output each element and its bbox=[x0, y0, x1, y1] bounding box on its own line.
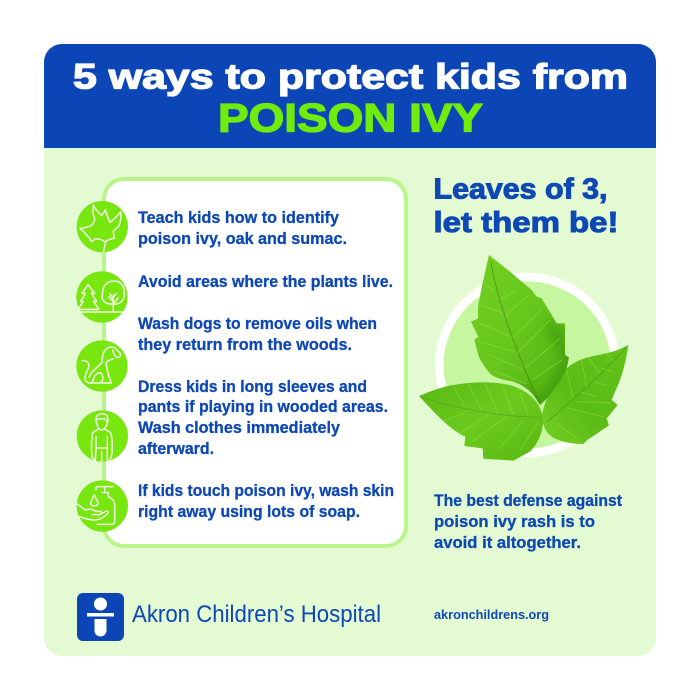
text: best defense: The best defense against bbox=[434, 491, 622, 510]
header banner bbox=[44, 44, 656, 148]
tip 1 text bbox=[138, 208, 347, 248]
title line 2: POISON IVY bbox=[218, 96, 483, 140]
tip 5 text: right away using lots of soap. bbox=[138, 502, 360, 521]
tip 1 text: poison ivy, oak and sumac. bbox=[138, 229, 347, 248]
tip 5 text: If kids touch poison ivy, wash skin bbox=[138, 481, 394, 500]
tip 4 text: pants if playing in wooded areas. bbox=[138, 397, 388, 416]
tip 1 text: Teach kids how to identify bbox=[138, 208, 340, 227]
tip 4 text: afterward. bbox=[138, 439, 214, 458]
logo: hospital mark bbox=[77, 593, 124, 641]
left leaf bbox=[419, 382, 543, 461]
tip 4 text: Dress kids in long sleeves and bbox=[138, 377, 367, 396]
tip 3 text: Wash dogs to remove oils when bbox=[138, 314, 377, 333]
website: akronchildrens.org bbox=[434, 607, 549, 622]
text: best defense: avoid it altogether. bbox=[434, 533, 581, 552]
heading: leaves of 3: Leaves of 3, bbox=[434, 174, 608, 206]
tip 3 text bbox=[138, 314, 377, 354]
title line 1: 5 ways to protect kids from bbox=[73, 56, 628, 96]
icon: soap and hand bbox=[77, 480, 128, 532]
illustration: poison ivy leaves bbox=[419, 255, 628, 461]
tip 4 text: Wash clothes immediately bbox=[138, 418, 341, 437]
icon: trees bbox=[76, 271, 128, 323]
tip 5 text bbox=[138, 481, 394, 521]
heading: leaves of 3 bbox=[434, 174, 618, 239]
text: best defense: poison ivy rash is to bbox=[434, 512, 595, 531]
top leaf bbox=[471, 255, 570, 407]
logo: hospital name: Akron Children’s Hospital bbox=[132, 601, 381, 628]
right leaf bbox=[542, 345, 628, 444]
tip 2 text: Avoid areas where the plants live. bbox=[138, 272, 393, 291]
text: best defense bbox=[434, 491, 622, 552]
icon: dog bbox=[76, 340, 128, 392]
tip 4 text bbox=[138, 377, 388, 458]
heading: leaves of 3: let them be! bbox=[434, 207, 618, 239]
panel: background card bbox=[44, 44, 656, 656]
infographic bbox=[44, 44, 656, 656]
tip 3 text: they return from the woods. bbox=[138, 335, 352, 354]
panel: tips list bbox=[104, 179, 406, 546]
icon: leaf bbox=[77, 201, 128, 252]
icon: child bbox=[77, 410, 128, 462]
